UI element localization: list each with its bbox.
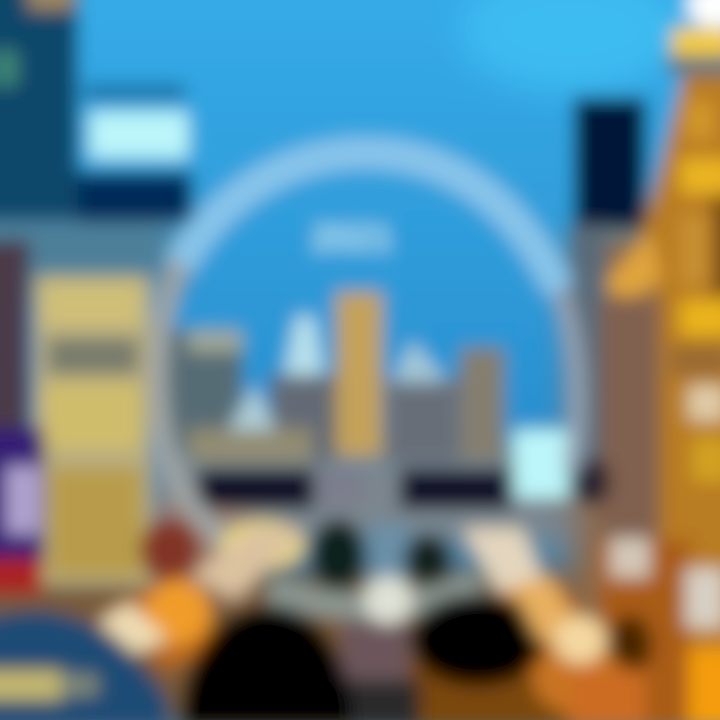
white spire low: [228, 385, 276, 430]
dark green right of road: [404, 534, 452, 586]
amber mid panel: [680, 215, 710, 285]
ring upper arc: [178, 153, 560, 290]
right golden facade: [640, 70, 720, 720]
beige building dark band: [48, 338, 138, 374]
grey light right: [610, 538, 650, 578]
gold corner top right: [672, 28, 720, 56]
left trail pale: [192, 528, 305, 600]
haze behind skyline: [150, 445, 570, 550]
skyline grey buildings: [270, 375, 336, 461]
beige building left: [35, 275, 150, 585]
right mid column: [570, 225, 606, 495]
right orange road glow: [570, 670, 645, 720]
right dark patch: [608, 615, 652, 675]
grey building left of ring: [160, 330, 242, 452]
white spire left: [284, 316, 324, 375]
navy band centre: [314, 468, 366, 508]
right lower orange: [600, 540, 690, 720]
gold band right three: [692, 438, 720, 482]
beige building lower band: [44, 383, 140, 449]
amber panel: [606, 232, 662, 296]
pale cloud left: [90, 112, 188, 158]
red sign base: [0, 558, 42, 594]
low tan base: [188, 428, 312, 462]
purple sign: [0, 428, 44, 568]
year label: 2021: [312, 217, 392, 258]
red patch lower left: [140, 518, 200, 582]
white corner top right: [687, 0, 720, 27]
pale right panel: [688, 385, 720, 421]
navy band: [198, 469, 314, 509]
skyline grey building right: [385, 378, 459, 462]
dark foreground shape left: [180, 605, 352, 720]
right deep orange corner: [688, 648, 720, 720]
grey light far right: [685, 568, 720, 628]
grey top of left building: [188, 330, 242, 352]
sky highlight top right: [460, 0, 680, 90]
gold band right two: [680, 300, 720, 336]
beige building upper band: [42, 283, 142, 327]
slate centre base: [340, 680, 420, 720]
tan tower right: [460, 348, 504, 460]
right brown mid band: [670, 345, 720, 377]
ground haze: [0, 570, 720, 720]
ring right side: [560, 290, 578, 470]
dark foreground shape right: [410, 594, 546, 686]
orange light trail left: [110, 575, 225, 670]
left tower window: [0, 50, 18, 86]
left dark tower: [0, 0, 78, 220]
amber upper panel: [685, 100, 715, 140]
haze right column: [570, 225, 720, 720]
pink haze left: [145, 500, 245, 590]
dark blue building left: [78, 172, 192, 222]
haze under left building: [0, 205, 180, 290]
right brown edge: [712, 195, 720, 295]
dome yellow band fade: [60, 674, 98, 696]
mid-ground haze layers: [0, 205, 720, 720]
blue dome bottom left: [0, 611, 168, 720]
left trail orange glow: [146, 580, 210, 644]
top shadow above cloud: [85, 84, 185, 100]
white spire right: [392, 340, 448, 382]
ring left side: [158, 262, 245, 560]
ground dark brown right: [400, 665, 630, 720]
upper right slate: [668, 50, 720, 74]
white inner sign: [6, 466, 40, 534]
dome yellow band: [0, 670, 62, 700]
left tower top ornament: [28, 0, 74, 10]
far left brown strip: [0, 240, 30, 440]
blue road centre: [370, 525, 408, 577]
gold bands right: [680, 158, 720, 194]
right light: [554, 616, 606, 664]
right trail pale: [462, 528, 548, 592]
central gold tower: [336, 292, 382, 456]
left trail yellow: [220, 521, 304, 569]
dark green left of road: [310, 519, 366, 591]
right trail mid: [510, 578, 578, 642]
pale light far left: [98, 602, 168, 654]
road arc grey: [270, 585, 480, 606]
mauve centre block: [342, 620, 408, 682]
beige building base: [50, 468, 142, 576]
right brown facade: [600, 300, 685, 540]
dark spot right: [574, 458, 610, 506]
pale cloud right of ring: [514, 430, 568, 498]
navy band right: [400, 469, 512, 509]
orange trail right lower: [500, 575, 630, 720]
centre white light: [364, 576, 412, 624]
right dark tower: [574, 98, 646, 228]
ring outline: [158, 153, 578, 560]
